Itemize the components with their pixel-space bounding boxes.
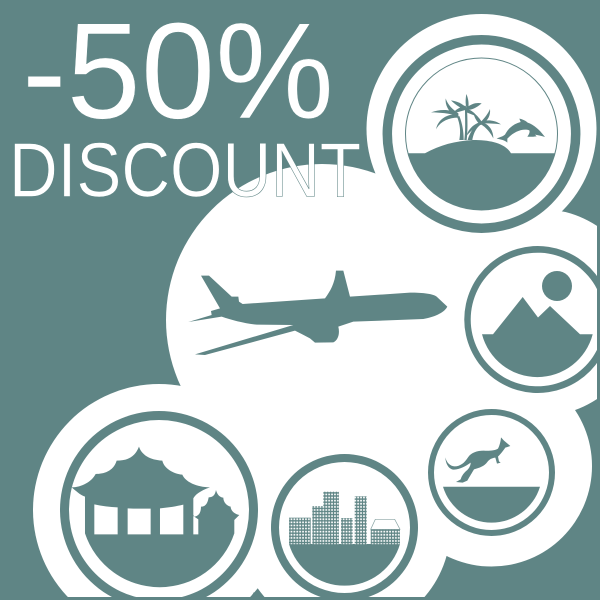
icon: mountains: [482, 297, 593, 377]
badge: mountains and sun: [464, 246, 600, 393]
badge: kangaroo: [431, 412, 552, 533]
ground: [443, 487, 540, 523]
ring: [271, 454, 418, 600]
ring: [431, 412, 552, 533]
bottom border strip: [0, 592, 600, 600]
icon: airplane: [188, 271, 447, 355]
ring: [464, 246, 600, 393]
headline: DISCOUNT: DISCOUNT: [9, 128, 361, 214]
ground: [289, 544, 400, 586]
right border strip: [597, 0, 600, 600]
icon: buildings: [289, 492, 400, 544]
icon: palm trees: [431, 94, 501, 140]
ring: [60, 411, 258, 600]
icon: sun: [542, 271, 572, 301]
badge: tropical island: [387, 40, 576, 228]
icon: dolphin: [497, 119, 545, 143]
sea and island: [408, 140, 555, 210]
outer ring: [387, 40, 576, 228]
icon: pagoda: [72, 447, 239, 587]
thin inner circle: [406, 58, 558, 210]
badge: city skyline: [271, 454, 418, 600]
badge: pagoda: [60, 411, 258, 600]
icon: kangaroo: [445, 437, 510, 483]
